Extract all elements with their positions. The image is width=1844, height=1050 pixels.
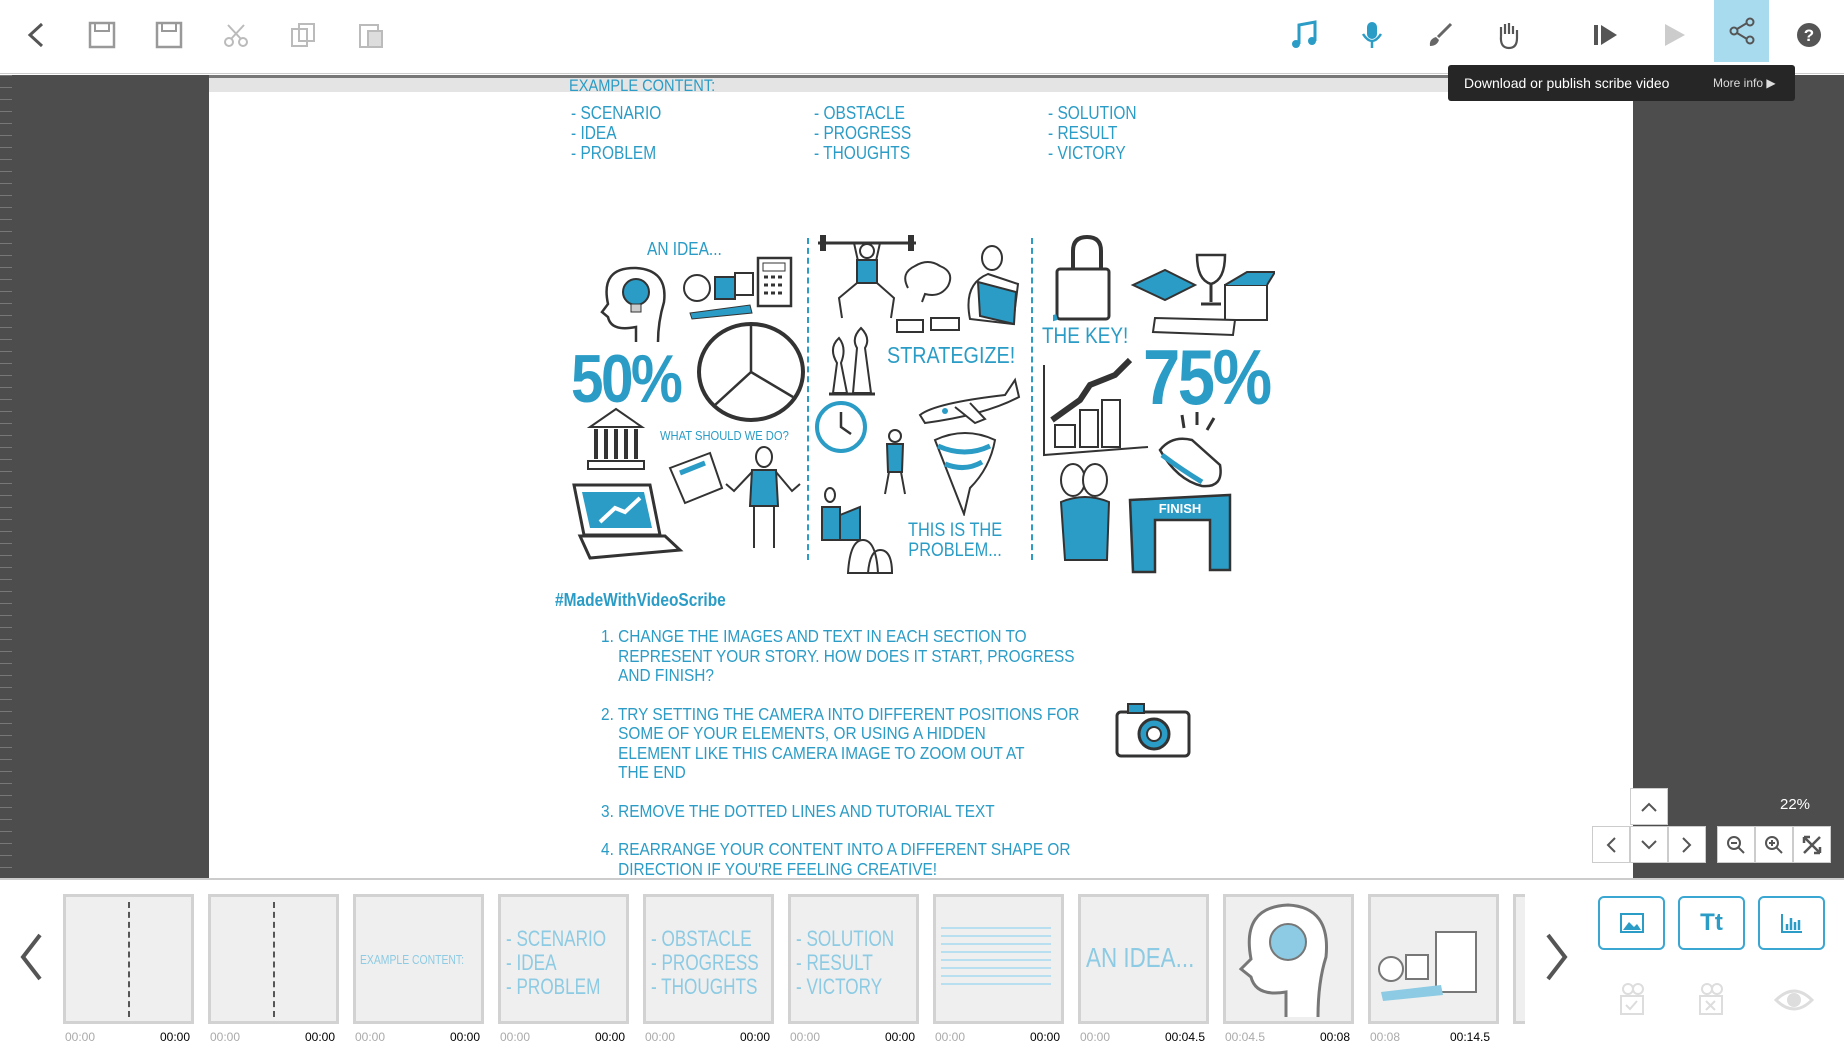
list col 3: - VICTORY [1048, 143, 1126, 163]
icon: trophy cap scroll [1130, 254, 1275, 336]
top ruler [209, 75, 1633, 92]
timestamps: 00:08 [1370, 1030, 1400, 1044]
icon: camera delete [1697, 983, 1729, 1022]
list col 1: - SCENARIO [571, 103, 661, 123]
label: an idea: AN IDEA... [647, 239, 722, 259]
icon: microphone [1362, 22, 1382, 48]
nav down [1630, 826, 1668, 863]
step 4: DIRECTION IF YOU'RE FEELING CREATIVE! [618, 858, 937, 878]
thumb 1 [63, 894, 194, 1024]
timeline [0, 878, 1844, 1050]
instructions [601, 627, 1079, 879]
icon: eye [1774, 985, 1814, 1020]
timestamps: 00:14.5 [1450, 1030, 1490, 1044]
icon: apple blocks calculator [683, 256, 792, 320]
fit [1793, 826, 1831, 863]
list col 1: - IDEA [571, 123, 617, 143]
zoom controls [1717, 826, 1831, 864]
nav: up [1630, 788, 1668, 825]
step 1: AND FINISH? [618, 665, 714, 685]
thumb 3 [353, 894, 484, 1024]
icon: save as [156, 22, 182, 48]
list col 2: - OBSTACLE [814, 103, 905, 123]
icon: people group [821, 487, 893, 574]
timestamps: 00:04.5 [1165, 1030, 1205, 1044]
icon: copy [291, 23, 315, 47]
timestamps: 00:00 [210, 1030, 240, 1044]
label: this is the problem [908, 520, 1002, 561]
icon: hand [1500, 23, 1518, 50]
step 2 [601, 704, 1079, 782]
left ruler [0, 75, 12, 878]
button: add chart [1758, 896, 1825, 950]
step 2: THE END [618, 762, 686, 782]
timestamps: 00:00 [935, 1030, 965, 1044]
thumb 3: EXAMPLE CONTENT: [360, 952, 464, 967]
timeline prev arrow [18, 932, 44, 987]
icon: music [1292, 20, 1316, 48]
timestamps: 00:00 [500, 1030, 530, 1044]
label: this is the problem: PROBLEM... [908, 540, 1002, 561]
icon: tools [668, 452, 724, 504]
icon: finish arch [1128, 494, 1232, 574]
nav right [1668, 826, 1706, 863]
icon: play [1665, 24, 1685, 46]
nav: left down right [1592, 826, 1706, 864]
timestamps: 00:00 [450, 1030, 480, 1044]
tooltip text: Download or publish scribe video [1464, 75, 1669, 91]
step 1 [601, 627, 1079, 686]
thumb 4: - PROBLEM [506, 974, 600, 999]
label: what should we do: WHAT SHOULD WE DO? [660, 428, 789, 443]
icon: laptop [572, 484, 684, 560]
thumb 8: AN IDEA... [1086, 942, 1194, 973]
icon: weightlifter [818, 235, 916, 318]
icon: padlock [1053, 235, 1110, 322]
icon: head with bulb [600, 266, 666, 342]
icon: pie chart [697, 322, 805, 422]
step 2: 2. TRY SETTING THE CAMERA INTO DIFFERENT POSITIONS FOR [601, 704, 1079, 724]
heading: example content: EXAMPLE CONTENT: [569, 76, 715, 95]
zoom out [1717, 826, 1755, 863]
step 1: 1. CHANGE THE IMAGES AND TEXT IN EACH SECTION TO [601, 626, 1027, 646]
timestamps: 00:00 [1080, 1030, 1110, 1044]
timestamps: 00:00 [160, 1030, 190, 1044]
list col 1: - PROBLEM [571, 143, 656, 163]
thumb 6: - SOLUTION [796, 926, 894, 951]
icon: clock [815, 401, 867, 453]
thumb 8 [1078, 894, 1209, 1024]
label: the key: THE KEY! [1042, 323, 1128, 348]
dashed divider 2 [1031, 238, 1033, 560]
icon: camera check [1618, 983, 1650, 1022]
thumb 4: - IDEA [506, 950, 557, 975]
icon: chess pieces [829, 326, 875, 396]
thumb 5: - PROGRESS [651, 950, 759, 975]
timestamps: 00:00 [790, 1030, 820, 1044]
timestamps: 00:00 [885, 1030, 915, 1044]
zoom in [1755, 826, 1793, 863]
timestamps: 00:00 [595, 1030, 625, 1044]
list col 2 [814, 103, 911, 163]
icon: save [88, 22, 116, 48]
list col 3: - SOLUTION [1048, 103, 1137, 123]
step 4 [601, 840, 1079, 879]
icon: cut [224, 24, 248, 47]
timestamps: 00:08 [1320, 1030, 1350, 1044]
button: add text: Tt [1700, 909, 1723, 936]
icon: brain [904, 261, 952, 302]
icon: puzzle pieces [896, 317, 960, 333]
list col 3: - RESULT [1048, 123, 1117, 143]
thumb 5: - OBSTACLE [651, 926, 752, 951]
zoom level: 22% [1780, 796, 1810, 813]
thumb 5 [643, 894, 774, 1024]
icon: clapping hands [1158, 412, 1222, 488]
icon: growth chart [1043, 358, 1148, 456]
label: this is the problem: THIS IS THE [908, 520, 1002, 541]
icon: help: ? [1803, 26, 1814, 45]
thumb 5: - THOUGHTS [651, 974, 757, 999]
icon: finish arch: FINISH [1159, 501, 1201, 516]
nav left [1592, 826, 1630, 863]
timestamps: 00:00 [645, 1030, 675, 1044]
list col 2: - PROGRESS [814, 123, 911, 143]
label: strategize: STRATEGIZE! [887, 342, 1015, 368]
list col 2: - THOUGHTS [814, 143, 910, 163]
icon: play from start [1594, 25, 1617, 45]
dashed divider 1 [807, 238, 809, 560]
icon: share (active) [1714, 0, 1769, 62]
thumb 7 [933, 894, 1064, 1024]
button: add image [1598, 896, 1665, 950]
button: add text [1678, 896, 1745, 950]
icon: paste [359, 24, 383, 48]
toolbar [0, 0, 1844, 74]
thumb 4 [498, 894, 629, 1024]
thumb 2 [208, 894, 339, 1024]
timestamps: 00:00 [1030, 1030, 1060, 1044]
icon: person shrugging [725, 446, 801, 548]
timestamps: 00:04.5 [1225, 1030, 1265, 1044]
step 1: REPRESENT YOUR STORY. HOW DOES IT START, PROGRESS [618, 646, 1075, 666]
step 4: 4. REARRANGE YOUR CONTENT INTO A DIFFERENT SHAPE OR [601, 839, 1071, 859]
step 2: ELEMENT LIKE THIS CAMERA IMAGE TO ZOOM OUT AT [618, 742, 1025, 762]
stat: 50%: 50% [571, 341, 680, 417]
icon: brush [1430, 23, 1452, 46]
icon: back [28, 23, 43, 47]
step 3: 3. REMOVE THE DOTTED LINES AND TUTORIAL TEXT [601, 800, 995, 820]
tooltip [1448, 65, 1795, 101]
thumb 6: - RESULT [796, 950, 873, 975]
icon: tornado [934, 432, 996, 516]
list col 3 [1048, 103, 1137, 163]
step 2: SOME OF YOUR ELEMENTS, OR USING A HIDDEN [618, 723, 986, 743]
icon: stressed person [884, 429, 906, 494]
workspace background [0, 75, 1844, 878]
canvas [209, 75, 1633, 878]
timeline next arrow [1544, 932, 1570, 987]
list col 1 [571, 103, 661, 163]
hashtag: #MadeWithVideoScribe [555, 590, 726, 610]
icon: person reading book [967, 245, 1020, 326]
timestamps: 00:00 [355, 1030, 385, 1044]
timestamps: 00:00 [65, 1030, 95, 1044]
more info: More info ▶ [1713, 76, 1776, 90]
icon: hugging people [1060, 463, 1110, 561]
icon: camera [1114, 700, 1192, 765]
timestamps: 00:00 [305, 1030, 335, 1044]
stat: 75%: 75% [1143, 333, 1270, 421]
thumb 9 [1223, 894, 1354, 1024]
thumb 10 [1368, 894, 1499, 1024]
icon: airplane [918, 378, 1020, 424]
timestamps: 00:00 [740, 1030, 770, 1044]
thumb 11 partial [1513, 894, 1525, 1024]
thumb 4: - SCENARIO [506, 926, 606, 951]
icon: bank [586, 408, 646, 470]
icon: help [1797, 23, 1821, 47]
thumb 6 [788, 894, 919, 1024]
thumb 6: - VICTORY [796, 974, 882, 999]
